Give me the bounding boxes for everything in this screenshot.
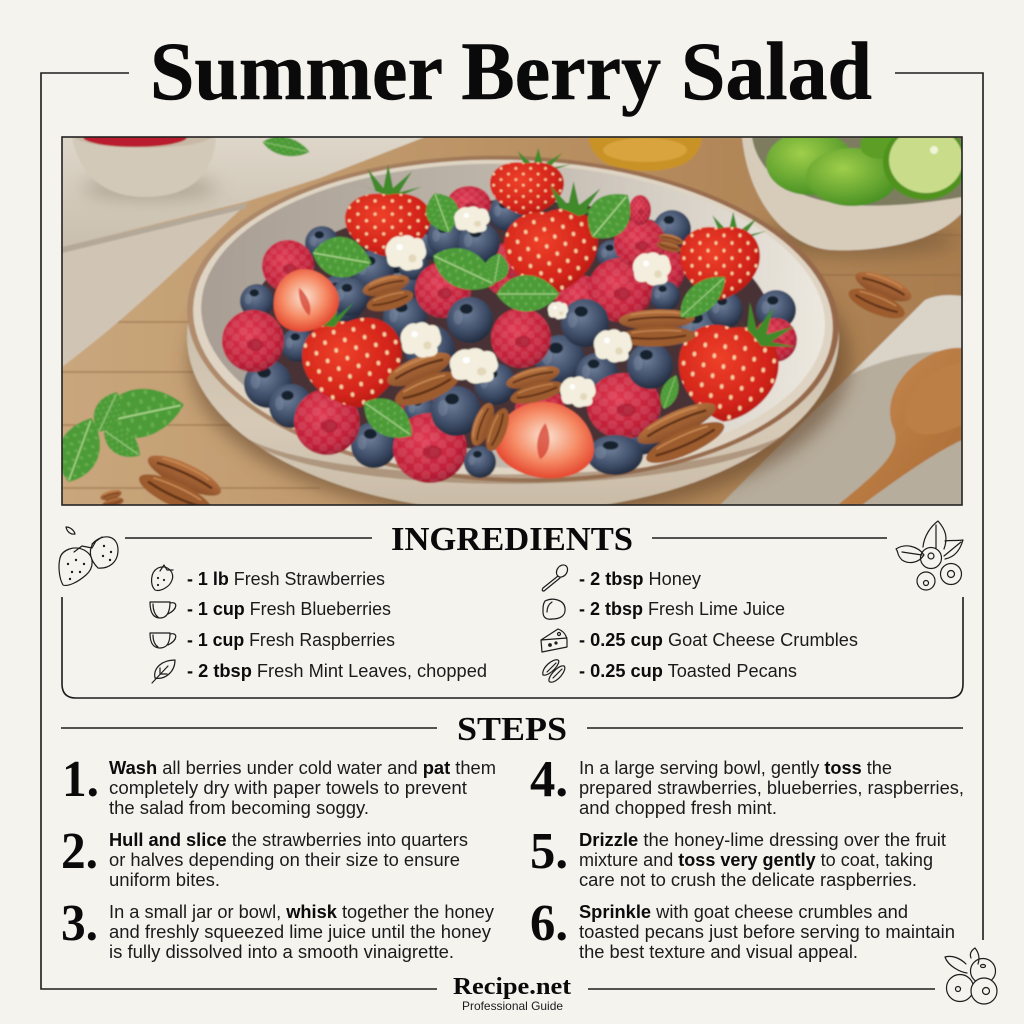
- step 2: Hull and slice the strawberries into quarters: [109, 830, 468, 850]
- step 4: prepared strawberries, blueberries, raspberries,: [579, 778, 964, 798]
- wooden spoon: [838, 348, 962, 505]
- step 3: 3.: [61, 895, 98, 952]
- step 5: Drizzle the honey-lime dressing over the fruit: [579, 830, 946, 850]
- goat cheese crumbles: [386, 206, 671, 407]
- step 2: uniform bites.: [109, 870, 220, 890]
- step 5: [530, 823, 946, 890]
- icon: strawberry: [152, 565, 173, 590]
- hero photo: berry salad bowl on wooden table: [49, 122, 967, 522]
- steps heading: STEPS: [457, 711, 567, 748]
- photo border: [62, 137, 962, 505]
- ingredient: goat cheese: - 0.25 cup Goat Cheese Crumbles: [579, 630, 858, 650]
- ingredients box: [62, 597, 963, 698]
- icon: spoon: [542, 563, 570, 591]
- step 1: the salad from becoming soggy.: [109, 798, 369, 818]
- mint on napkin: [262, 138, 310, 158]
- step 6: [530, 895, 955, 962]
- step 6: Sprinkle with goat cheese crumbles and: [579, 902, 908, 922]
- step 3: is fully dissolved into a smooth vinaigrette.: [109, 942, 454, 962]
- ingredient: lime juice: - 2 tbsp Fresh Lime Juice: [579, 599, 785, 619]
- ingredients list left: [150, 565, 487, 683]
- icon: cheese: [541, 629, 567, 652]
- step 1: 1.: [62, 751, 99, 808]
- ingredient: blueberries: - 1 cup Fresh Blueberries: [187, 599, 391, 619]
- loose pecans: [99, 266, 915, 522]
- ingredient: mint: - 2 tbsp Fresh Mint Leaves, chopped: [187, 661, 487, 681]
- footer brand: Professional Guide: [462, 999, 563, 1013]
- step 2: [61, 823, 468, 890]
- loose mint sprig: [62, 388, 184, 482]
- napkin right: [720, 350, 962, 504]
- icon: pecans: [543, 660, 565, 682]
- blueberries: [240, 195, 796, 468]
- step 5: care not to crush the delicate raspberries.: [579, 870, 917, 890]
- ingredient: honey: - 2 tbsp Honey: [579, 569, 701, 589]
- step 1: Wash all berries under cold water and pat them: [109, 758, 496, 778]
- step 3: [61, 895, 494, 962]
- icon: blueberries and leaves top right: [896, 521, 963, 590]
- step 2: 2.: [61, 823, 98, 880]
- ingredients list right: [541, 563, 858, 682]
- step 6: the best texture and visual appeal.: [579, 942, 858, 962]
- footer brand: Recipe.net: [453, 974, 571, 1000]
- icon: cup: [150, 633, 176, 648]
- ingredient: raspberries: - 1 cup Fresh Raspberries: [187, 630, 395, 650]
- ingredients heading: INGREDIENTS: [391, 521, 633, 558]
- step 4: In a large serving bowl, gently toss the: [579, 758, 892, 778]
- honey jar: [588, 137, 702, 171]
- more blueberries in front: [431, 297, 673, 478]
- underlayer of berries filling the gaps: [315, 220, 725, 455]
- step 3: and freshly squeezed lime juice until the honey: [109, 922, 491, 942]
- ingredient: strawberries: - 1 lb Fresh Strawberries: [187, 569, 385, 589]
- step 6: toasted pecans just before serving to maintain: [579, 922, 955, 942]
- step 5: 5.: [530, 823, 568, 880]
- bowl shadow: [182, 300, 862, 504]
- salad base shadow: [248, 200, 772, 450]
- small bowl top left: [72, 138, 218, 206]
- icon: blueberries bottom right: [945, 948, 997, 1004]
- icon: lime: [543, 599, 565, 619]
- wooden table: [62, 137, 962, 505]
- cut strawberries: [263, 260, 600, 485]
- lime bowl: [742, 124, 967, 256]
- icon: strawberries top left: [59, 527, 118, 585]
- footer brand: [453, 974, 571, 1013]
- mint leaves: [309, 181, 734, 449]
- step 6: 6.: [530, 895, 568, 952]
- raspberries: [222, 186, 797, 483]
- serving bowl: [181, 145, 844, 512]
- icon: mint leaf: [152, 660, 175, 683]
- step 4: and chopped fresh mint.: [579, 798, 777, 818]
- step 5: mixture and toss very gently to coat, taking: [579, 850, 933, 870]
- step 4: [530, 751, 964, 818]
- step 4: 4.: [530, 751, 568, 808]
- ingredient: pecans: - 0.25 cup Toasted Pecans: [579, 661, 797, 681]
- pecans: [360, 232, 729, 471]
- title: Summer Berry Salad: [150, 25, 872, 117]
- step 1: completely dry with paper towels to prevent: [109, 778, 467, 798]
- napkin left: [62, 137, 425, 367]
- step 2: or halves depending on their size to ensure: [109, 850, 460, 870]
- step 1: [62, 751, 496, 818]
- icon: cup: [150, 602, 176, 618]
- whole strawberries: [283, 148, 807, 426]
- step 3: In a small jar or bowl, whisk together the honey: [109, 902, 494, 922]
